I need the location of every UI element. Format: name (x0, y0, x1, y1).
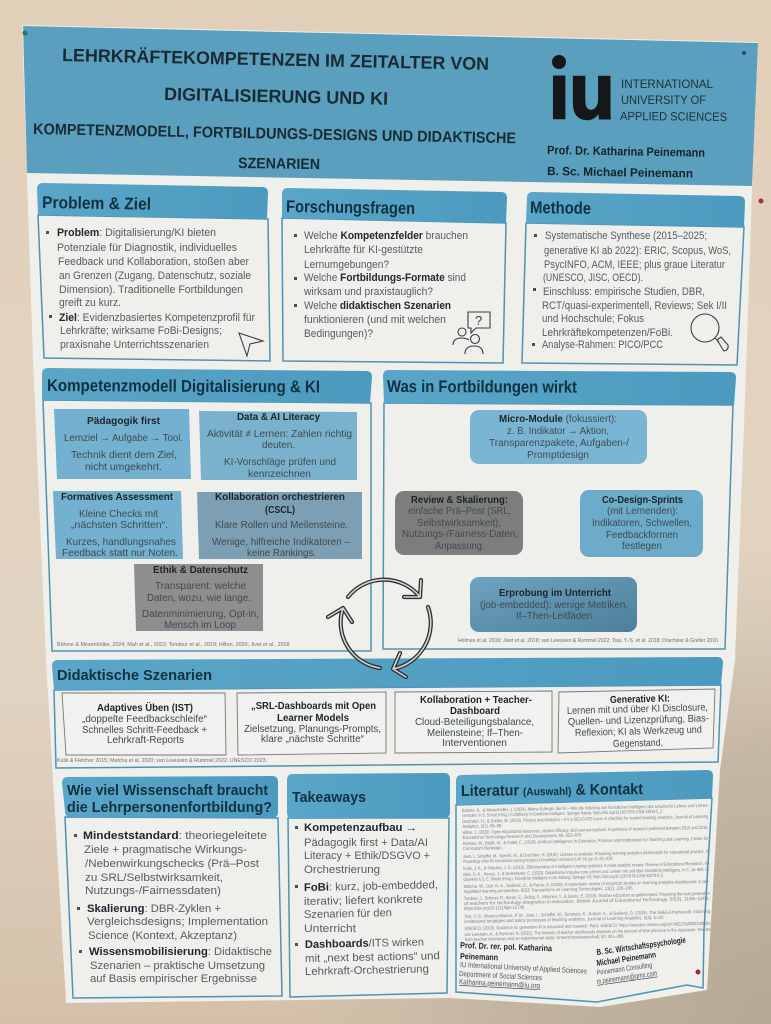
body text: Nutzungs-/Fairnessdaten) (85, 885, 221, 897)
body text (294, 230, 468, 340)
body text: Systematische Synthese (2015–2025; (545, 230, 707, 242)
card: Data & AI Literacy (199, 411, 357, 480)
step: Review & Skalierung (395, 491, 523, 555)
body text: Lehrkräfte; wirksame FoBi-Designs; (60, 325, 222, 337)
panel: Methode (522, 192, 745, 365)
body text: Wissensmobilisierung: Didaktische (89, 946, 272, 958)
body text: Pädagogik first + Data/AI (304, 837, 428, 849)
reference list: Kulik, J. A., & Fletcher, J. D. (2015). Effectiveness of intelligent tutoring systems: A meta-analytic review. Review of Educational Research, 86 (463, 861, 710, 871)
logo: IU: APPLIED SCIENCES (620, 109, 727, 124)
scenario: Generative KI (558, 689, 715, 753)
body text: Orchestrierung (304, 864, 380, 876)
body text: FoBi: kurz, job-embedded, (304, 879, 438, 894)
contact: Katharina Peinemann: Katharina.peinemann@iu.org (459, 977, 540, 990)
heading: Didaktische Szenarien (57, 668, 212, 684)
step: Review & Skalierung: Selbstwirksamkeit), (417, 517, 501, 529)
authors (547, 143, 705, 181)
icon: cycle arrows (328, 580, 431, 677)
scenario: Kollaboration + Teacher-Dashboard: Cloud-Beteiligungsbalance, (415, 717, 534, 728)
body text (295, 822, 440, 978)
reference list: regulated learning perspective. IEEE Transactions on Learning Technologies, 13(2), 226–245. (464, 885, 634, 894)
body text: Science (Kontext, Akzeptanz) (88, 930, 237, 942)
step: Co-Design-Sprints: (mit Lernenden): (607, 505, 678, 517)
scenario: Generative KI: Gegenstand. (613, 738, 663, 750)
logo: IU: INTERNATIONAL (621, 77, 713, 91)
reference list: Tsai, Y.-S., Moreno-Marcos, P. M., Jivet, I., Scheffel, M., Tammets, K., Kollom, K., & Gašević, D. (2018). The SHEILA framework: Informing (464, 909, 711, 919)
step: Review & Skalierung: Nutzungs-/Fairness-Daten, (402, 528, 518, 540)
reference list: of teachers for technology integration in education. British Journal of Educational Technology, 50(3), 1189–1209. (464, 896, 710, 906)
authors: B. Sc. Michael Peinemann (547, 164, 693, 181)
reference list: van Leeuwen, A., & Rummel, N. (2022). The function of teacher dashboards depends on the amount of time pressure in the classroom: Results (465, 927, 711, 937)
body text (46, 227, 255, 351)
body text: Literacy + Ethik/DSGVO + (304, 850, 430, 862)
body text: Dimension). Traditionelle Fortbildungen (59, 284, 243, 296)
step: Review & Skalierung: Review & Skalierung: (411, 494, 508, 506)
panel: Problem & Ziel (37, 183, 270, 361)
body text: Feedback und Kollaboration, stoßen aber (58, 256, 249, 268)
heading: Takeaways (292, 790, 366, 806)
scenario: Generative KI: Reflexion; KI als Werkzeug und (575, 725, 702, 739)
card: Data & AI Literacy: Aktivität ≠ Lernen: Zahlen richtig (207, 428, 352, 440)
step: Co-Design-Sprints: Co-Design-Sprints (602, 494, 683, 506)
contact: Michael Peinemann: Michael Peinemann (596, 949, 657, 968)
reference list: Tondeur, J., Scherer, R., Baran, E., Siddiq, F., Valtonen, T., & Sointu, E. (2019). Teacher educators as gatekeepers: Preparing the next generation (464, 891, 710, 901)
heading: Problem & Ziel (42, 193, 151, 214)
scenario: Kollaboration + Teacher-Dashboard (395, 691, 552, 753)
card: Ethik & Datenschutz: Datenminimierung, Opt-in, (142, 608, 259, 620)
card: Data & AI Literacy: kennzeichnen (248, 468, 311, 480)
body text: Potenziale für Diagnostik, individuelles (57, 242, 237, 254)
reference list (462, 803, 711, 942)
card: Data & AI Literacy: KI-Vorschläge prüfen und (224, 456, 336, 468)
scenario: Adaptives Üben (62, 693, 226, 755)
reference list: Educational Technology Research and Development, 68, 853–876. (462, 832, 583, 840)
reference list: Holmes, W., Bialik, M., & Fadel, C. (2019). Artificial Intelligence In Education. Promise and Implications for Teaching and Learning. Center for (463, 836, 709, 846)
card: Ethik & Datenschutz: Mensch im Loop (164, 619, 236, 631)
step: Co-Design-Sprints: festlegen (622, 540, 662, 552)
step: Co-Design-Sprints (580, 490, 703, 557)
card: Ethik & Datenschutz: Daten, wozu, wie lange. (147, 592, 251, 604)
card: Formatives Assessment: Feedback statt nur Noten. (62, 547, 178, 559)
panel: Kompetenzmodell (42, 368, 372, 651)
contact: Katharina Peinemann (459, 940, 587, 990)
reference list: Curriculum Redesign. (463, 845, 503, 851)
contact: Michael Peinemann: Peinemann Consulting (596, 960, 653, 977)
icon: two people with question: ? (475, 313, 482, 328)
card: Pädagogik first (54, 409, 191, 479)
scenario: Adaptives Üben: Adaptives Üben (IST) (97, 701, 193, 714)
citation: Böhme & Mesenhöller, 2024; Mah et al., 2023; Tondeur et al., 2019; Hilton, 2020; Jivet et al., 2018. (57, 642, 291, 648)
body text: praxisnahe Unterrichtsszenarien (60, 339, 209, 351)
body text: Welche Kompetenzfelder brauchen (304, 230, 468, 242)
reference list: Drachsler, H., & Greller, W. (2016). Privacy and Analytics – It's a DELICATE Issue. A checklist for trusted learning analytics. Journal of Learning (462, 814, 709, 824)
body text: Kompetenzaufbau → (304, 822, 417, 834)
reference list: UNESCO. (2023). Guidance for generative AI in education and research. Paris: UNESCO. https://unesdoc.unesco.org/ark:/48223/pf0000386693 (464, 921, 711, 931)
reference list: https://doi.org/10.1111/bjet.12748 (464, 905, 524, 911)
card: Pädagogik first: Pädagogik first (87, 415, 160, 427)
step: Erprobung im Unterricht: Erprobung im Unterricht (499, 587, 611, 599)
body text: und Hochschule; Fokus (542, 313, 644, 325)
body text: zu SRL/Selbstwirksamkeit, (85, 872, 223, 884)
title: SZENARIEN (238, 155, 320, 173)
body text: Lehrkräfte für KI-gestützte (304, 244, 423, 256)
reference list: Proceedings of the 8th International Learning Analytics & Knowledge Conference (LAK '18) (pp. 31–40). ACM. (463, 856, 613, 864)
card: Pädagogik first: nicht umgekehrt. (85, 461, 162, 473)
body text: Welche didaktischen Szenarien (304, 300, 451, 312)
body text: Lehrkräftekompetenzen/FoBi. (542, 327, 673, 339)
contact: Katharina Peinemann: Department of Social Sciences (459, 969, 542, 982)
panel: Forschungsfragen (282, 188, 507, 363)
scenario: Generative KI: Lernen mit und über KI Disclosure, (567, 702, 708, 717)
body text: Ziel: Evidenzbasiertes Kompetenzprofil für (59, 312, 255, 324)
citation: Kulik & Fletcher 2015; Matcha et al. 2020; van Leeuwen & Rummel 2022; UNESCO 2023. (57, 758, 267, 764)
citation: Holmes et al. 2019; Jivet et al. 2018; van Leeuwen & Rummel 2022; Tsai, Y.-S. et al. 2018; Drachsler & Greller 2016 (458, 638, 718, 644)
card: Kollaboration orchestrieren: Kollaboration orchestrieren (215, 491, 345, 503)
scenario: Generative KI: Quellen- und Lizenzprüfung, Bias- (568, 713, 709, 728)
body text: Szenarien – praktische Umsetzung (90, 960, 265, 972)
body text: Skalierung: DBR-Zyklen + (87, 903, 221, 915)
card: Ethik & Datenschutz: Transparent: welche (155, 580, 246, 592)
body text: Lehrkraft-Orchestrierung (305, 963, 429, 978)
card: Pädagogik first: Lernziel → Aufgabe → Tool. (64, 432, 183, 444)
body text: generative KI ab 2022): ERIC, Scopus, WoS, (544, 245, 731, 257)
step: Co-Design-Sprints: Indikatoren, Schwellen, (592, 517, 692, 529)
panel: Literatur & Kontakt (456, 770, 713, 1002)
step: Co-Design-Sprints: Feedbackformen (606, 529, 678, 541)
card: Pädagogik first: Technik dient dem Ziel, (71, 449, 177, 461)
reference list: Analytics, 3(1), 89–98. (462, 823, 502, 829)
heading: Wie viel Wissenschaft braucht (67, 782, 268, 799)
title: LEHRKRÄFTEKOMPETENZEN IM ZEITALTER VON (62, 45, 489, 74)
reference list: Hilton, J. (2020). Open educational resources, student efficacy, and user perceptions: A synthesis of research published between 2015 and 2018. (462, 825, 708, 835)
heading: Literatur (Auswahl) & Kontakt (461, 781, 643, 800)
body text: auf Basis empirischer Ergebnisse (90, 973, 257, 985)
reference list: institutional strategies and policy processes of learning analytics. Journal of Learning Analytics, 5(3), 5–20. (464, 915, 664, 924)
step: Review & Skalierung: einfache Prä–Post (SRL, (408, 505, 511, 517)
body text: Mindeststandard : theoriegeleitete (83, 830, 267, 842)
title banner (22, 26, 758, 186)
step: Erprobung im Unterricht (470, 577, 637, 632)
step: Micro-Module: Promptdesign (527, 449, 589, 461)
body text: funktionieren (und mit welchen (304, 314, 446, 326)
panel: Takeaways (287, 773, 450, 997)
body text: an Grenzen (Zugang, Datenschutz, soziale (59, 270, 251, 282)
body text: Unterricht (304, 923, 356, 935)
reference list: Jivet, I., Scheffel, M., Specht, M., & Drachsler, H. (2018). License to evaluate: Preparing learning analytics dashboards for educational practice. In (463, 849, 709, 859)
scenario: Kollaboration + Teacher-Dashboard: Dashboard (450, 706, 500, 717)
heading: die Lehrpersonenfortbildung? (67, 799, 272, 816)
contact: Katharina Peinemann: Prof. Dr. rer. pol. Katharina (460, 940, 552, 953)
card: Kollaboration orchestrieren: Wenige, hilfreiche Indikatoren – (212, 536, 350, 548)
reference list: verändert. In S. Schulz (Hrsg.), Fortbildung in Künstliche Intelligenz. Springer Nature. https://doi.org/10.1007/978-3-658-43816-5_3 (462, 809, 662, 818)
body text: Einschluss: empirische Studien, DBR, (543, 286, 705, 298)
scenario: Kollaboration + Teacher-Dashboard: Meilensteine; If–Then- (427, 728, 523, 739)
step: Micro-Module: Micro-Module (fokussiert): (499, 413, 617, 425)
logo: IU: UNIVERSITY OF (621, 93, 706, 107)
title: KOMPETENZMODELL, FORTBILDUNGS-DESIGNS UND DIDAKTISCHE (33, 121, 516, 147)
body text: Lernumgebungen? (304, 259, 389, 271)
heading: Kompetenzmodell Digitalisierung & KI (47, 376, 320, 396)
reference list: Gloerfeld & S. E. Wrede (Hrsg.), Künstliche Intelligenz in der Bildung. Springer VS. https://doi.org/10.1007/978-3-658-40079-8_5 (463, 873, 664, 882)
reference list: Matcha, W., Uzir, N. A., Gašević, D., & Pardo, A. (2020). A systematic review of empirical studies on learning analytics dashboards: A self- (464, 879, 710, 889)
scenario: SRL-Dashboards: Zielsetzung, Planungs-Prompts, (244, 724, 381, 735)
body text: RCT/quasi-experimentell, Reviews; Sek I/II (542, 300, 727, 312)
icon: two people with question (453, 312, 490, 354)
scenario: SRL-Dashboards: klare „nächste Schritte“ (261, 734, 364, 745)
contact: Katharina Peinemann: Peinemann (460, 951, 498, 962)
card: Data & AI Literacy: deuten. (262, 439, 295, 451)
scenario: Generative KI: Generative KI: (610, 693, 670, 706)
card: Kollaboration orchestrieren: keine Rankings. (247, 547, 316, 559)
scenario: Kollaboration + Teacher-Dashboard: Interventionen (442, 738, 507, 749)
scenario: SRL-Dashboards: Learner Models (277, 713, 349, 724)
heading (67, 782, 272, 816)
step: Micro-Module: z. B. Indikator → Aktion, (507, 425, 609, 437)
body text: greift zu kurz. (59, 297, 121, 309)
panel: Wie viel Wissenschaft (62, 776, 282, 998)
reference list: from teacher interviews and an experimental study. Unterrichtswissenschaft, 50, 361–388. (465, 934, 625, 942)
step: Micro-Module (470, 410, 647, 464)
body text: Szenarien für den (304, 907, 392, 921)
heading: Was in Fortbildungen wirkt (387, 377, 577, 397)
panel: Didaktische Szenarien (52, 657, 723, 768)
body text: /Nebenwirkungschecks (Prä–Post (85, 858, 259, 870)
reference list: Mah, D.-K., Hense, J., & Dufentester, C. (2023). Didaktische Impulse zum Lehren und Lernen mit und über künstliche Intelligenz. In C. de Witt, C. (463, 867, 709, 877)
contact: Michael Peinemann: B. Sc. Wirtschaftspsychologie (596, 935, 687, 957)
heading: Forschungsfragen (286, 197, 415, 218)
card: Ethik & Datenschutz: Ethik & Datenschutz (153, 564, 248, 576)
body text: Ziele + pragmatische Wirkungs- (84, 844, 247, 856)
scenario: SRL-Dashboards (237, 692, 386, 755)
card: Ethik & Datenschutz (134, 564, 263, 631)
reference list: Böhme, K., & Mesenhöller, J. (2024). Meine Kollegin, die KI – Wie die Nutzung von künstlicher Intelligenz das schulische Lehren und Lernen (462, 803, 708, 813)
card: Formatives Assessment: Kleine Checks mit (79, 508, 158, 520)
body text (74, 830, 272, 985)
logo: IU: iu (549, 47, 614, 135)
body text: Welche Fortbildungs-Formate sind (304, 272, 466, 284)
authors: Prof. Dr. Katharina Peinemann (547, 143, 705, 160)
card: Data & AI Literacy: Data & AI Literacy (237, 411, 320, 423)
card: Kollaboration orchestrieren: Klare Rollen und Meilensteine. (215, 519, 348, 531)
card: Formatives Assessment (53, 491, 183, 559)
icon: cursor (239, 333, 263, 356)
scenario: Kollaboration + Teacher-Dashboard: Kollaboration + Teacher- (420, 695, 532, 706)
body text: wirksam und praxistauglich? (303, 286, 433, 298)
body text: Dashboards/ITS wirken (305, 937, 424, 951)
step: Review & Skalierung: Anpassung (435, 540, 482, 552)
body text: mit „next best actions“ und (305, 950, 440, 965)
body text: Bedingungen)? (304, 328, 373, 340)
contact: Michael Peinemann (596, 935, 687, 986)
heading: Methode (530, 198, 591, 218)
card: Kollaboration orchestrieren (197, 491, 362, 559)
card: Kollaboration orchestrieren: (CSCL) (265, 504, 295, 516)
title (33, 45, 516, 173)
contact: Michael Peinemann: m.peinemann@gmx.com (596, 969, 658, 986)
scenario: Adaptives Üben: Lehrkraft-Reports (107, 735, 184, 746)
step: Micro-Module: Transparenzpakete, Aufgaben-/ (489, 437, 629, 449)
body text: Problem: Digitalisierung/KI bieten (57, 227, 216, 239)
scenario: Adaptives Üben: Schnelles Schritt-Feedback + (82, 725, 207, 736)
card: Formatives Assessment: „nächsten Schritten“. (71, 519, 168, 531)
scenario: SRL-Dashboards: „SRL-Dashboards mit Open (251, 701, 376, 712)
card: Formatives Assessment: Kurzes, handlungsnahes (66, 536, 176, 548)
contact: Katharina Peinemann: IU International University of Applied Sciences (460, 960, 587, 976)
card: Formatives Assessment: Formatives Assessment (61, 491, 173, 503)
body text: Analyse-Rahmen: PICO/PCC (542, 339, 663, 351)
step: Erprobung im Unterricht: If–Then-Leitfäden (516, 610, 592, 622)
title: DIGITALISIERUNG UND KI (164, 84, 388, 109)
step: Erprobung im Unterricht: (job-embedded): wenige Metriken, (480, 599, 628, 611)
body text: iterativ; liefert konkrete (304, 894, 423, 908)
scenario: Adaptives Üben: „doppelte Feedbackschleife“ (82, 714, 207, 725)
body text (532, 230, 731, 351)
panel: Was in Fortbildungen wirkt (383, 370, 736, 649)
logo: IU (552, 55, 726, 121)
body text: PsycINFO, ACM, IEEE; plus graue Literatur (544, 259, 725, 271)
icon: magnifier (691, 314, 728, 351)
body text: (UNESCO, JISC, OECD). (543, 272, 643, 284)
body text: Vergleichsdesigns; Implementation (87, 916, 268, 928)
